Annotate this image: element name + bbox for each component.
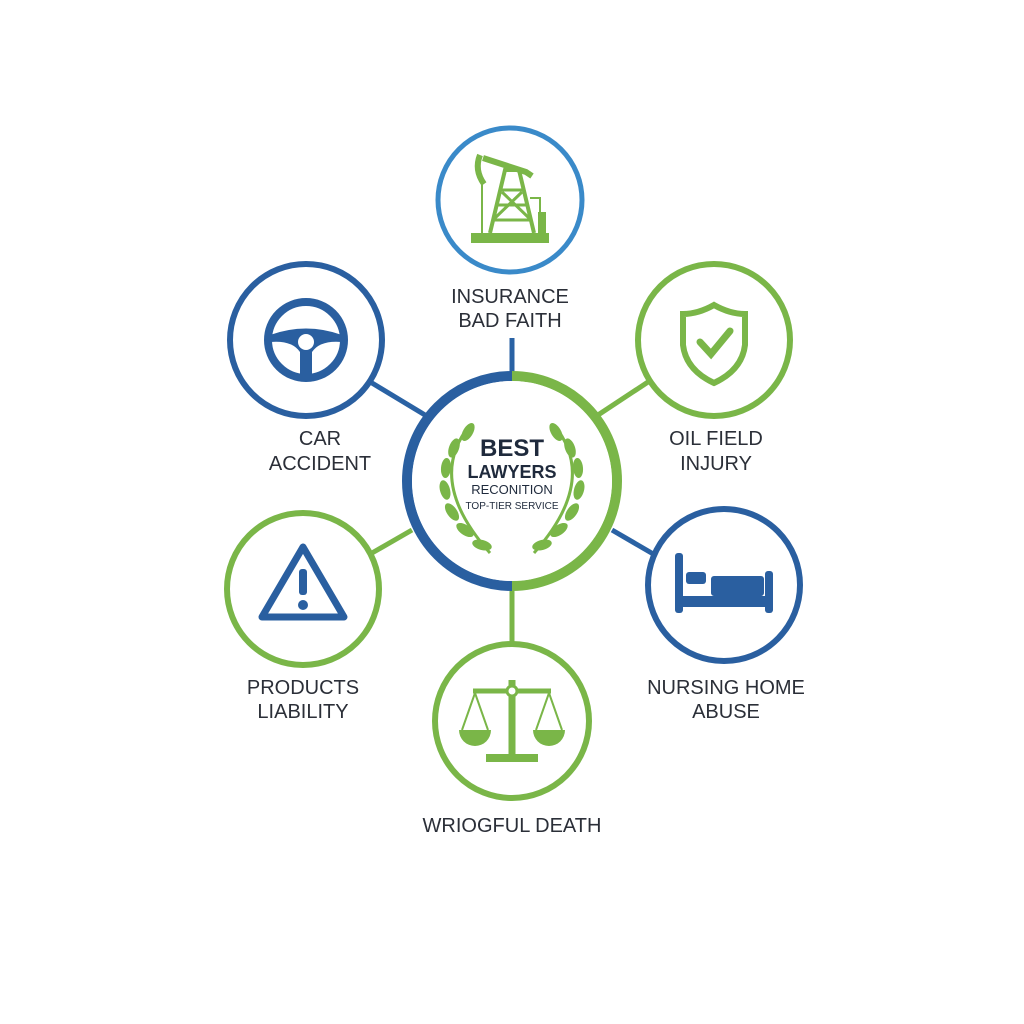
laurel — [438, 421, 586, 553]
labels: INSURANCE — [451, 286, 569, 308]
labels: WRIOGFUL DEATH — [423, 815, 601, 837]
labels: BAD FAITH — [458, 310, 562, 332]
labels: OIL FIELD — [669, 428, 763, 450]
labels: CAR — [299, 428, 341, 450]
labels — [247, 286, 805, 837]
center badge: BEST — [480, 435, 544, 462]
node: car accident — [230, 264, 382, 416]
node: insurance bad faith (oil rig) — [438, 128, 582, 272]
labels: LIABILITY — [257, 701, 349, 723]
connectors — [372, 338, 655, 645]
labels: PRODUCTS — [247, 677, 359, 699]
labels: INJURY — [680, 453, 752, 475]
node: products liability (warning) — [227, 513, 379, 665]
center badge: TOP-TIER SERVICE — [466, 501, 559, 512]
center badge: LAWYERS — [467, 462, 557, 482]
labels: ABUSE — [692, 701, 760, 723]
center badge — [407, 376, 617, 586]
node: oil field injury (shield) — [638, 264, 790, 416]
labels: ACCIDENT — [269, 453, 371, 475]
node: wrongful death (scales) — [435, 644, 589, 798]
center badge: RECONITION — [471, 482, 553, 497]
node: nursing home abuse (bed) — [648, 509, 800, 661]
labels: NURSING HOME — [647, 677, 805, 699]
